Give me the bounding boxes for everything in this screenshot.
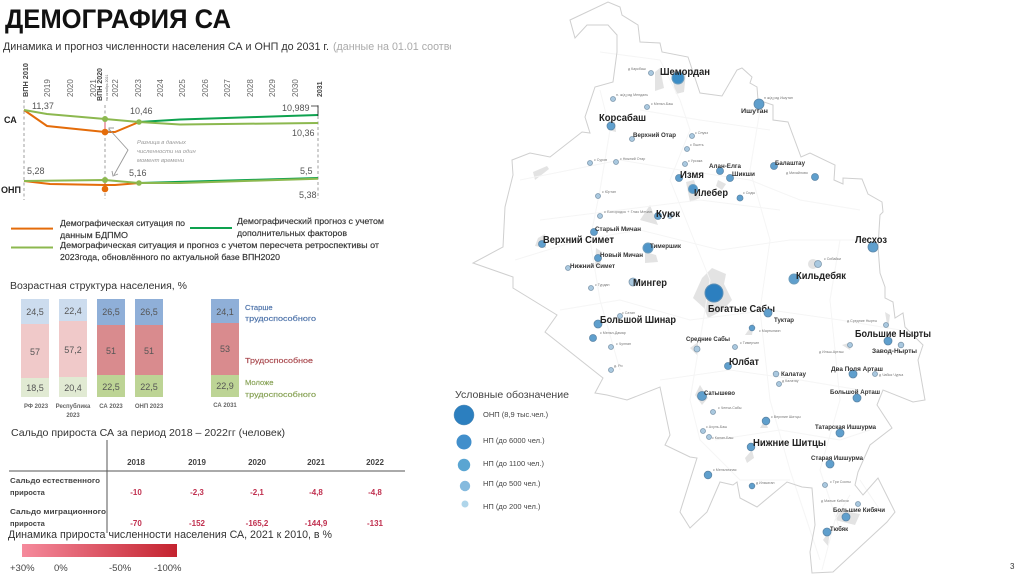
north settlements: с Урсака	[688, 159, 702, 163]
subtitle: population dynamics	[3, 42, 451, 52]
chart year axis labels: ВПН 2010	[23, 63, 30, 97]
bar legend: трудоспособного	[245, 314, 316, 323]
chart legend: Демографическая ситуация по	[60, 219, 186, 228]
row: natural balance: -4,8	[368, 488, 382, 497]
chart value labels: 5,38	[299, 190, 317, 200]
map legend	[454, 389, 569, 511]
south-east settlements: Татарская Ишшурма	[815, 424, 876, 431]
bar: СА 2031	[211, 299, 239, 409]
south-west settlements: с Чепчи-Сабы	[718, 406, 742, 410]
bar legend: Моложе	[245, 378, 273, 387]
chart year axis labels: 2029	[268, 79, 277, 97]
north settlements: с Олуяз	[695, 131, 708, 135]
chart value labels: 10,46	[130, 106, 153, 116]
bar: СА 2023: 26,5	[102, 307, 120, 317]
central settlements	[538, 208, 887, 350]
north settlements: Шемордан	[660, 66, 710, 78]
table header	[127, 458, 384, 467]
row: migration balance: -152	[189, 519, 206, 528]
line chart: population forecast	[1, 63, 324, 200]
table header: 2021	[307, 458, 325, 467]
row: natural balance: -2,3	[190, 488, 204, 497]
south-east settlements: с Верхние Шитцы	[771, 415, 801, 419]
north settlements: с Нижний Отар	[620, 157, 645, 161]
chart year axis labels: 2022	[111, 79, 120, 97]
chart year axis labels: 2021	[89, 79, 98, 97]
chart year axis labels: 2025	[178, 79, 187, 97]
bar: ОНП 2023: 22,5	[140, 382, 158, 392]
south-east settlements: д Малые Кибячи	[821, 499, 849, 503]
central settlements: с Мартынкин	[759, 329, 781, 333]
series: orange ONP	[24, 181, 139, 185]
chart value labels	[27, 101, 317, 200]
central settlements: Верхний Симет	[543, 234, 614, 246]
north settlements: п ж/д рзд Ишутан	[764, 96, 793, 100]
table header: 2018	[127, 458, 145, 467]
north settlements: Алан-Елга	[709, 163, 741, 170]
bar: ОНП 2023: ОНП 2023	[135, 404, 164, 410]
row: migration balance: -70	[130, 519, 142, 528]
map boundary	[473, 2, 925, 573]
chart value labels: 10,36	[292, 128, 315, 138]
chart legend: Демографический прогноз с учетом	[237, 217, 384, 226]
series: light green ONP	[24, 179, 318, 183]
row: migration balance: -165,2	[246, 519, 269, 528]
chart markers	[102, 116, 142, 192]
south-west settlements: Юлбат	[729, 356, 759, 368]
chart year axis labels: 2024	[156, 79, 165, 97]
bar: СА 2023: 22,5	[102, 382, 120, 392]
map road network	[515, 52, 900, 570]
north settlements: Илебер	[694, 187, 728, 199]
row: natural balance: -4,8	[309, 488, 323, 497]
annotation: data difference: момент времени	[137, 158, 185, 164]
chart year axis labels: 2030	[291, 79, 300, 97]
south-west settlements	[590, 311, 775, 489]
south-east settlements: Большие Нырты	[855, 328, 931, 340]
gradient scale: +30%	[10, 563, 35, 574]
central settlements: Тимершик	[650, 243, 682, 250]
heading: population growth dynamics: Динамика прироста численности населения СА, 2021 к 2010, в %	[8, 529, 332, 541]
south-east settlements: Большой Арташ	[830, 388, 880, 396]
bar: ОНП 2023: 51	[144, 346, 154, 356]
south-west settlements: с Чулпан	[616, 342, 631, 346]
map legend: Условные обозначение	[455, 389, 569, 401]
chart year axis labels: 2023	[134, 79, 143, 97]
bar: Республика 2023	[56, 299, 91, 419]
heading: age structure: Возрастная структура населения, %	[10, 281, 187, 292]
chart legend: 2023года, обновлённого по актуальной базе ВПН2020	[60, 253, 281, 262]
south-east settlements: с Три Сосны	[830, 480, 851, 484]
south-east settlements: Завод-Нырты	[872, 348, 917, 355]
south-west settlements: Большой Шинар	[600, 314, 676, 326]
chart year axis labels: 2028	[246, 79, 255, 97]
map legend: НП (до 1100 чел.)	[483, 459, 545, 468]
central settlements: с Сибайки	[824, 257, 841, 261]
table header: 2020	[248, 458, 266, 467]
bar: РФ 2023: 24,5	[26, 307, 44, 317]
north settlements: Ишутан	[741, 108, 768, 115]
central settlements: Кильдебяк	[796, 270, 847, 282]
central settlements: с Богородск + Глаз Мечан	[604, 210, 652, 214]
chart legend: Демографическая ситуация и прогноз с учетом пересчета ретроспективы от	[60, 241, 379, 250]
row: natural balance	[10, 476, 382, 497]
chart year axis labels: 2019	[43, 79, 52, 97]
south-west settlements: д Ильчиган	[756, 481, 775, 485]
central settlements: Мингер	[633, 277, 667, 289]
annotation: data difference: численности на один	[137, 149, 196, 155]
heading: balance table: Сальдо прироста СА за период 2018 – 2022гг (человек)	[11, 427, 285, 439]
central settlements: Богатые Сабы	[708, 303, 775, 315]
bar: РФ 2023: 57	[30, 347, 40, 357]
chart value labels: 10,989	[282, 103, 310, 113]
south-west settlements: с Сатан	[622, 311, 635, 315]
south-east settlements: Большие Кибячи	[833, 506, 885, 514]
table header: 2019	[188, 458, 206, 467]
central settlements: Нижний Симет	[570, 262, 615, 270]
annotation: data difference: Разница в данных	[137, 140, 187, 146]
north settlements: д Каркбаш	[628, 67, 646, 71]
north settlements: с Суров	[594, 158, 607, 162]
central settlements: с Турдан	[595, 283, 610, 287]
central settlements: Старый Мичан	[595, 225, 641, 233]
south-east settlements	[747, 319, 931, 536]
map legend: НП (до 500 чел.)	[483, 479, 541, 488]
chart year axis labels: ВПН 2020	[97, 68, 104, 101]
bar: СА 2031: 22,9	[216, 381, 234, 391]
series: dark green SA	[139, 115, 318, 122]
series: dark green ONP	[139, 178, 318, 183]
annotation: data difference	[137, 140, 196, 164]
bar: Республика 2023: 20,4	[64, 383, 82, 393]
north settlements: с Юртан	[602, 190, 616, 194]
gradient scale: -50%	[109, 563, 132, 574]
south-west settlements: с Ахуль-Баш	[706, 425, 727, 429]
bar: Республика 2023: 2023	[66, 413, 80, 419]
row: migration balance	[10, 507, 384, 528]
south-east settlements: д Средние Нырты	[847, 319, 877, 323]
chart year axis labels: 2031	[317, 81, 324, 97]
south-west settlements: с Мельничная	[713, 468, 737, 472]
chart legend: дополнительных факторов	[237, 229, 347, 238]
central settlements: Новый Мичан	[600, 251, 643, 259]
south-east settlements: Старая Ишшурма	[811, 455, 863, 462]
row: migration balance: -144,9	[305, 519, 328, 528]
north settlements: Верхний Отар	[633, 131, 676, 139]
north settlements: с Сиды	[743, 191, 755, 195]
north settlements: Балаштау	[775, 160, 805, 167]
north settlements: д Михайлово	[786, 171, 808, 175]
chart year axis labels: 2020	[66, 79, 75, 97]
bar: СА 2023: СА 2023	[99, 404, 123, 410]
north settlements: Измя	[680, 169, 704, 181]
bar: ОНП 2023: 26,5	[140, 307, 158, 317]
south-east settlements: Тюбяк	[830, 525, 849, 533]
gradient scale: -100%	[154, 563, 182, 574]
bar legend: Старше	[245, 303, 273, 312]
map legend: ОНП (8,9 тыс.чел.)	[483, 410, 549, 419]
subtitle: population dynamics: (данные на 01.01 соответствующего года)	[333, 41, 541, 53]
page number: 3	[1010, 562, 1015, 571]
row: natural balance: -10	[130, 488, 142, 497]
bar legend	[245, 303, 316, 399]
chart legend	[11, 217, 384, 262]
chart year axis labels: 2027	[223, 79, 232, 97]
bar: ОНП 2023	[135, 299, 164, 410]
chart value labels: 5,16	[129, 168, 147, 178]
bar: РФ 2023: РФ 2023	[24, 404, 49, 410]
row: migration balance: Сальдо миграционного	[10, 507, 106, 516]
bar: РФ 2023	[21, 299, 49, 410]
central settlements: Туктар	[774, 317, 794, 324]
label: СА: СА	[4, 115, 17, 125]
south-west settlements: с Калан-Баш	[712, 436, 734, 440]
map legend: НП (до 200 чел.)	[483, 502, 541, 511]
north settlements	[588, 66, 818, 201]
south-east settlements: д Ильш-Арташ	[819, 350, 844, 354]
map settlement areas	[533, 68, 890, 546]
bar: Республика 2023: 22,4	[64, 306, 82, 316]
title: ДЕМОГРАФИЯ СА	[5, 4, 231, 34]
chart year axis labels: на октябрь 2021	[105, 75, 109, 101]
south-east settlements: Калатау	[781, 371, 806, 378]
bar: РФ 2023: 18,5	[26, 383, 44, 393]
bar legend: Трудоспособное	[245, 356, 313, 365]
row: migration balance: -131	[367, 519, 384, 528]
south-west settlements: д. Ри	[614, 364, 622, 368]
bar: Республика 2023: 57,2	[64, 345, 82, 355]
chart year axis labels	[23, 63, 324, 101]
chart legend: данным БДПМО	[60, 231, 128, 240]
bar: СА 2023	[97, 299, 125, 410]
north settlements: с Пшеть	[690, 143, 704, 147]
series: light green SA	[24, 110, 318, 124]
gradient scale	[10, 544, 182, 574]
north settlements: п. ж/д рзд Мендаль	[616, 93, 648, 97]
row: natural balance: прироста	[10, 488, 46, 497]
north settlements: Шикши	[732, 171, 755, 178]
bar: СА 2023: 51	[106, 346, 116, 356]
row: natural balance: -2,1	[250, 488, 264, 497]
table header: 2022	[366, 458, 384, 467]
south-east settlements: Два Поля Арташ	[831, 366, 883, 373]
chart value labels: 5,5	[300, 166, 313, 176]
stacked bars: age structure	[21, 299, 316, 419]
south-west settlements: Сатышево	[704, 390, 735, 397]
table: population balance	[9, 440, 405, 533]
bar: СА 2031: 53	[220, 344, 230, 354]
north settlements: с Мельн-Баш	[651, 102, 673, 106]
chart value labels: 11,37	[32, 101, 54, 111]
map legend: НП (до 6000 чел.)	[483, 436, 545, 445]
bar legend: трудоспособного	[245, 390, 316, 399]
central settlements: Лесхоз	[855, 234, 887, 246]
gradient scale: 0%	[54, 563, 68, 574]
map: district	[473, 2, 931, 573]
bar: СА 2031: СА 2031	[213, 403, 237, 409]
label: ОНП: ОНП	[1, 185, 21, 195]
bar: Республика 2023: Республика	[56, 403, 91, 410]
south-east settlements: д Чабья Чурча	[879, 373, 903, 377]
south-west settlements: с Мельн-Дамар	[600, 331, 626, 335]
chart value labels: 5,28	[27, 166, 45, 176]
south-east settlements: Нижние Шитцы	[753, 437, 826, 449]
central settlements: с Тимерчин	[740, 341, 759, 345]
arrows: annotation pointers	[109, 128, 128, 176]
north settlements: Корсабаш	[599, 112, 646, 124]
row: natural balance: Сальдо естественного	[10, 476, 100, 485]
series: orange SA	[24, 110, 139, 132]
row: migration balance: прироста	[10, 519, 46, 528]
chart year axis labels: 2026	[201, 79, 210, 97]
subtitle: population dynamics: Динамика и прогноз численности населения СА и ОНП до 2031 г.	[3, 41, 329, 53]
central settlements: Куюк	[656, 208, 681, 220]
south-east settlements: д Калатау	[782, 379, 799, 383]
bar: СА 2031: 24,1	[216, 307, 234, 317]
south-west settlements: Средние Сабы	[686, 335, 730, 343]
